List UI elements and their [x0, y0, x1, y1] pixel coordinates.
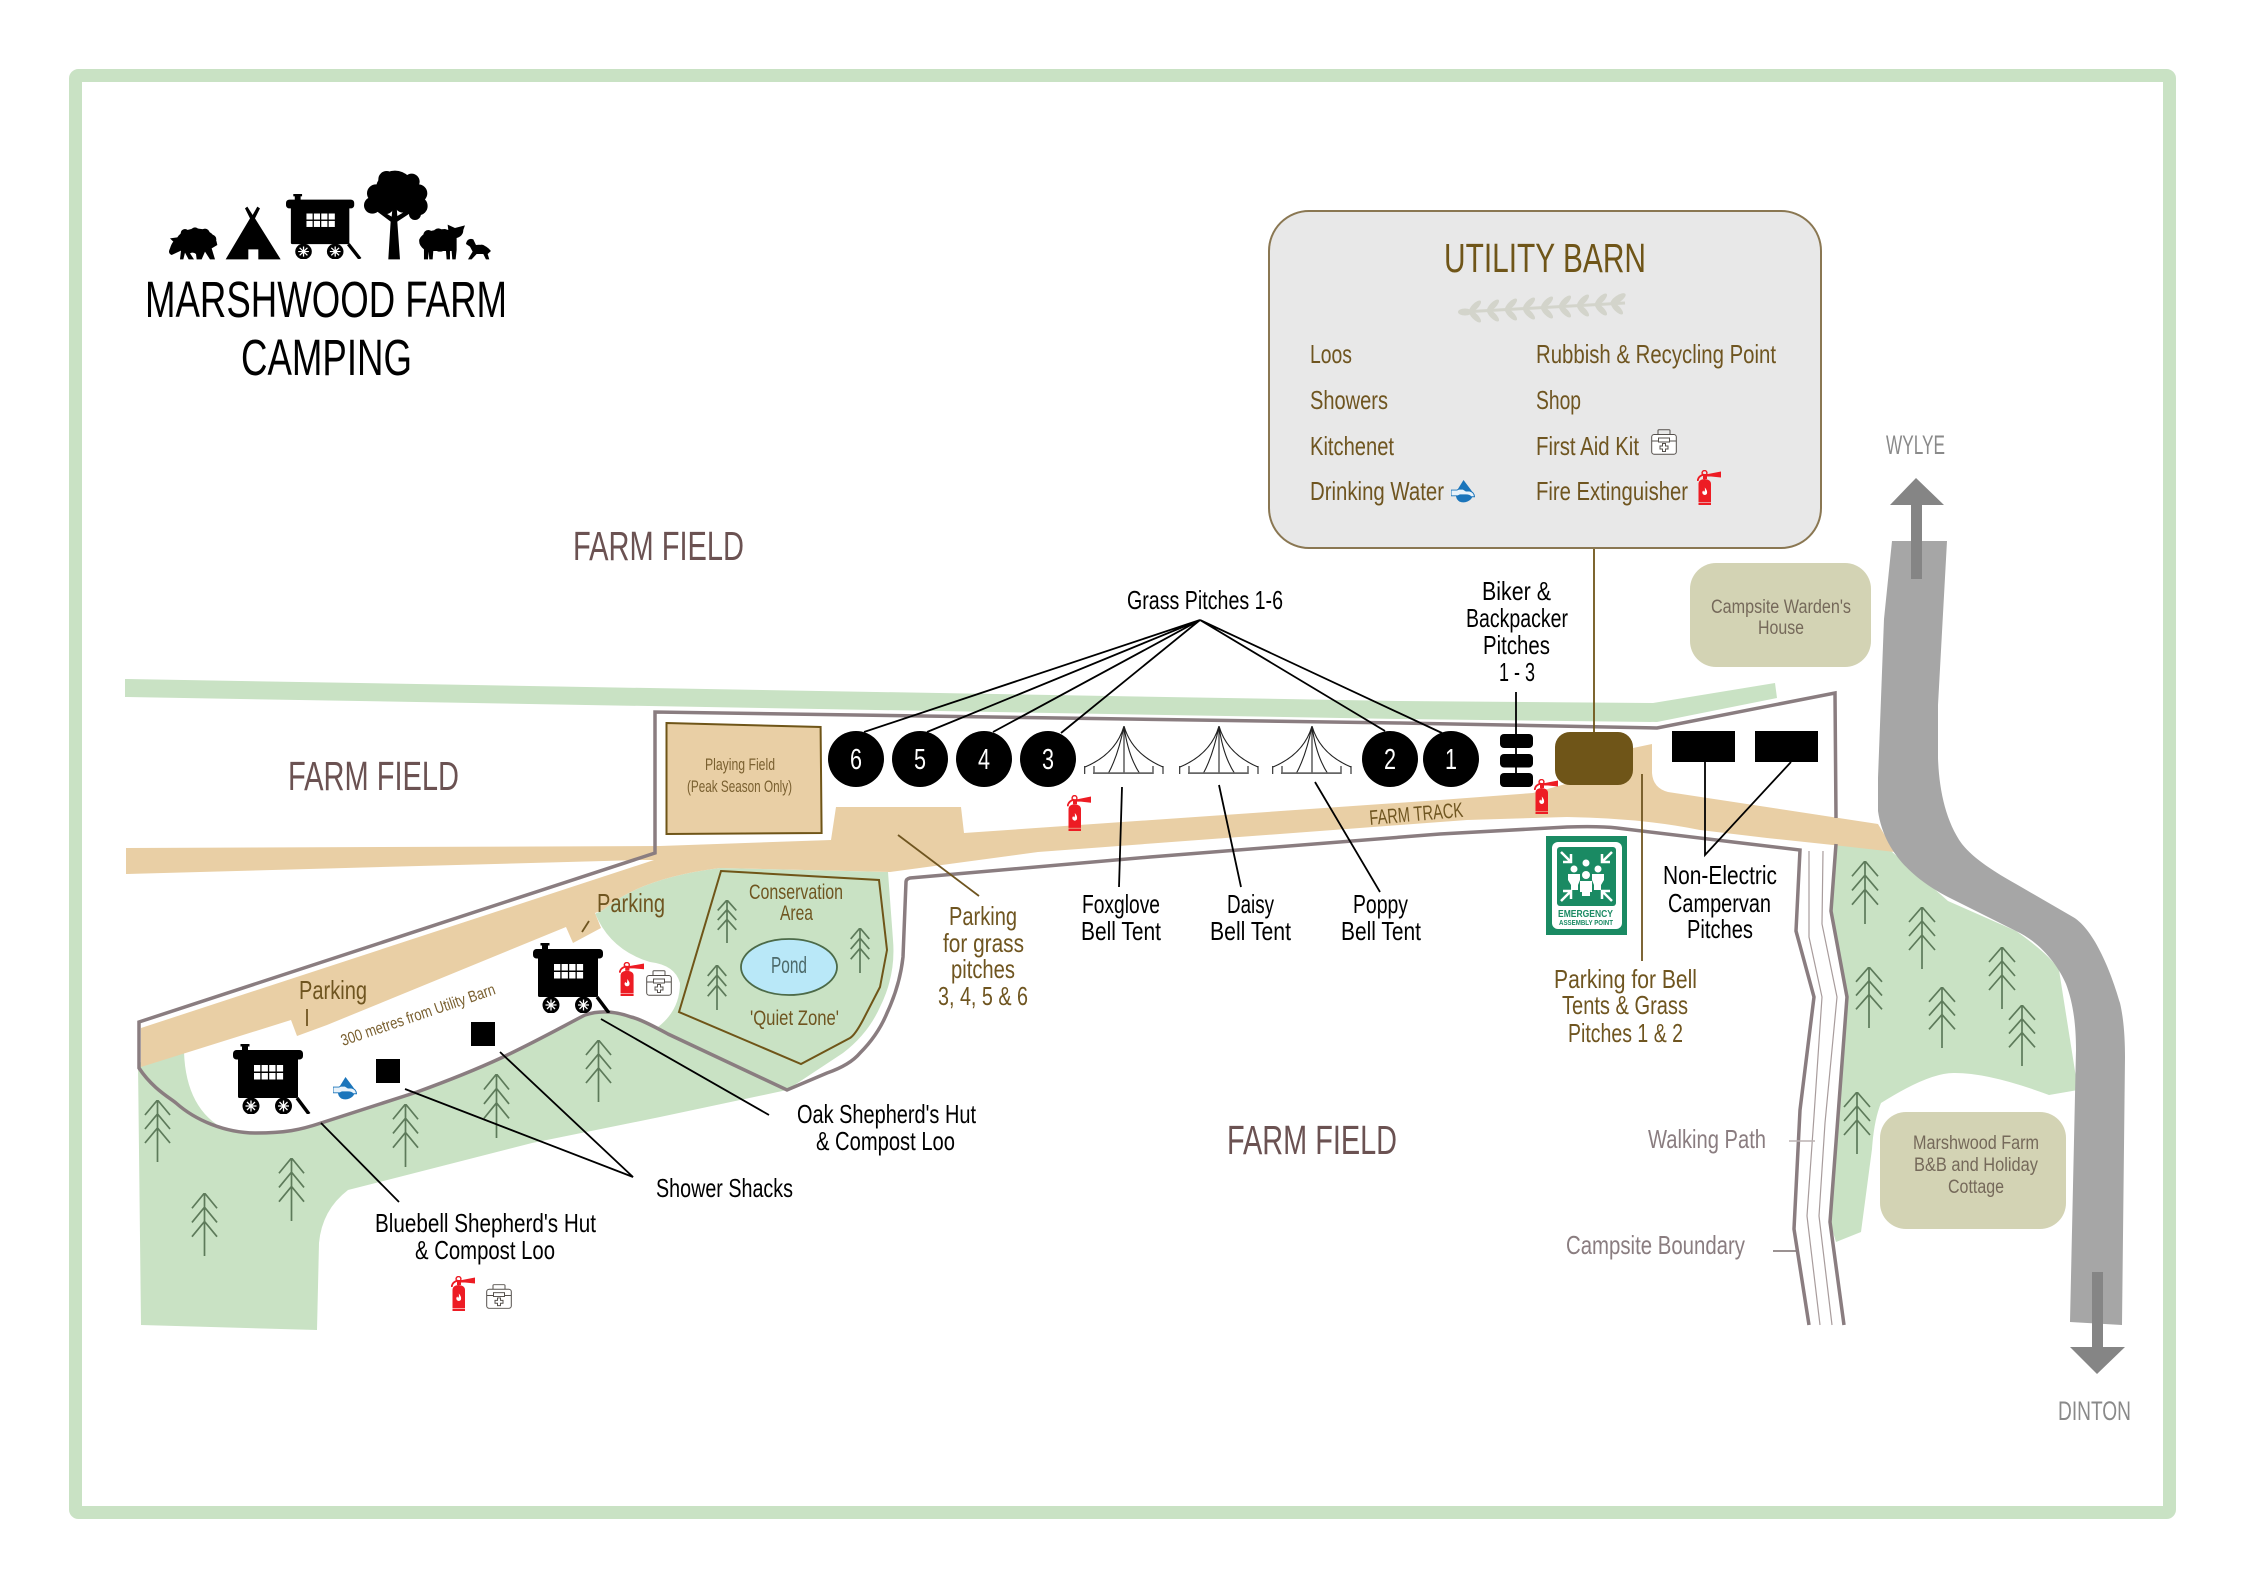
- dinton label: DINTON: [2058, 1396, 2131, 1426]
- facilities list: Rubbish & Recycling Point: [1536, 339, 1777, 369]
- logo title: MARSHWOOD FARM: [145, 271, 507, 328]
- parking for grass pitches: Parking: [949, 901, 1017, 931]
- logo title: [145, 271, 507, 386]
- marshwood farm b&b: Marshwood Farm: [1913, 1133, 2039, 1154]
- bluebell label: [375, 1208, 597, 1265]
- biker and backpacker label: [1466, 576, 1568, 687]
- marshwood farm b&b: [1880, 1112, 2066, 1229]
- icon: fire extinguisher: [1698, 471, 1721, 505]
- logo title: CAMPING: [241, 329, 412, 386]
- playing field: Playing Field: [705, 755, 775, 774]
- hut and shower leader lines: [321, 1019, 769, 1202]
- grass pitches: 5: [914, 744, 926, 776]
- emergency assembly point sign: ASSEMBLY POINT: [1559, 920, 1614, 927]
- facilities list: Drinking Water: [1310, 476, 1444, 506]
- panel: utility barn: [1269, 211, 1821, 548]
- camping clearing: [184, 913, 680, 1134]
- bell tent labels: Daisy: [1227, 889, 1274, 919]
- parking for bell tents: Pitches 1 & 2: [1568, 1018, 1683, 1048]
- icon: fire extinguisher at oak: [620, 963, 644, 996]
- icon: first aid kit: [1652, 430, 1676, 454]
- conservation area: Pond: [771, 952, 807, 978]
- field labels: FARM FIELD: [1227, 1117, 1397, 1163]
- bell tents: [1085, 726, 1351, 774]
- shower shacks: [376, 1022, 495, 1083]
- parking label: upper: Parking: [597, 888, 665, 918]
- parking for grass pitches: pitches: [951, 954, 1015, 984]
- biker pitches: [1500, 692, 1533, 787]
- parking for grass pitches: 3, 4, 5 & 6: [938, 981, 1028, 1011]
- field labels: [288, 523, 1397, 1163]
- bell tent labels: Poppy: [1353, 889, 1408, 919]
- panel heading: UTILITY BARN: [1444, 235, 1646, 281]
- woodland area: right: [1830, 844, 2078, 1242]
- bell tent leader lines: [1119, 782, 1380, 892]
- emergency assembly point sign: [1546, 836, 1627, 935]
- bluebell shepherd's hut: [233, 1044, 309, 1114]
- logo: ewe: [419, 225, 465, 259]
- facilities list: Shop: [1536, 385, 1581, 415]
- emergency assembly point sign: EMERGENCY: [1558, 909, 1613, 920]
- non-electric label: Campervan: [1668, 888, 1771, 918]
- logo: shepherd's hut: [286, 194, 360, 259]
- non-electric label: [1663, 860, 1777, 944]
- parking for grass pitches: for grass: [943, 928, 1024, 958]
- logo: lamb: [466, 239, 491, 259]
- bluebell label: Bluebell Shepherd's Hut: [375, 1208, 597, 1238]
- woodland trees: [145, 861, 2035, 1256]
- grass pitches: 1: [1445, 744, 1457, 776]
- parking for bell tents: [1554, 774, 1697, 1048]
- east boundary: [1830, 844, 1847, 1325]
- bell tent labels: Bell Tent: [1210, 916, 1292, 946]
- marshwood farm b&b: B&B and Holiday: [1914, 1155, 2038, 1176]
- logo: [145, 171, 507, 386]
- facilities list: [1310, 339, 1777, 506]
- logo: oak tree: [364, 171, 428, 259]
- distance note: 300 metres from Utility Barn: [339, 981, 498, 1050]
- bell tent labels: Foxglove: [1082, 889, 1160, 919]
- non-electric campervan pitches: [1672, 731, 1818, 855]
- ornament: laurel: [1458, 291, 1627, 324]
- oak label: & Compost Loo: [816, 1126, 955, 1156]
- non-electric label: Non-Electric: [1663, 860, 1777, 890]
- campsite warden's house: [1690, 563, 1871, 667]
- facilities list: Kitchenet: [1310, 431, 1395, 461]
- oak shepherd's hut: [533, 943, 609, 1014]
- grass pitches: [828, 731, 1479, 787]
- farm track: [126, 744, 1895, 1067]
- bluebell label: & Compost Loo: [415, 1235, 555, 1265]
- biker and backpacker label: 1 - 3: [1499, 657, 1535, 687]
- conservation area: [679, 871, 887, 1064]
- grass pitches: 6: [850, 744, 862, 776]
- arrow: to dinton: [2070, 1272, 2125, 1374]
- farm track label: FARM TRACK: [1368, 799, 1464, 830]
- utility barn building: [1555, 732, 1633, 785]
- shower label: Shower Shacks: [656, 1173, 793, 1203]
- campsite boundary fence: [139, 693, 1836, 1325]
- oak label: Oak Shepherd's Hut: [797, 1099, 977, 1129]
- arrow: to wylye: [1890, 478, 1944, 579]
- icon: fire extinguisher barn: [1535, 780, 1558, 814]
- parking for bell tents: Tents & Grass: [1562, 990, 1688, 1020]
- woodland area: left: [138, 868, 893, 1330]
- bell tent labels: Bell Tent: [1341, 916, 1422, 946]
- grass pitches leader lines: [864, 620, 1442, 733]
- conservation area: 'Quiet Zone': [750, 1007, 839, 1030]
- bell tent labels: Bell Tent: [1081, 916, 1162, 946]
- bell tent labels: [1081, 889, 1422, 946]
- icon: fire extinguisher at bluebell: [452, 1277, 475, 1311]
- icon: first aid at bluebell: [487, 1285, 511, 1308]
- walking path: [1807, 851, 1837, 1325]
- facilities list: Loos: [1310, 339, 1352, 369]
- campsite boundary label: Campsite Boundary: [1566, 1230, 1745, 1260]
- non-electric label: Pitches: [1687, 914, 1753, 944]
- road: [1878, 541, 2125, 1325]
- logo: sheep: [169, 227, 217, 259]
- conservation area: Conservation: [749, 881, 843, 904]
- icon: drinking water: [1451, 480, 1474, 502]
- facilities list: Showers: [1310, 385, 1388, 415]
- conservation area: Area: [780, 902, 813, 925]
- utility barn connector: [1593, 548, 1595, 732]
- green field hedge: [125, 679, 1777, 722]
- field labels: FARM FIELD: [573, 523, 744, 569]
- biker and backpacker label: Biker &: [1482, 576, 1551, 606]
- icon: water at bluebell: [333, 1077, 356, 1099]
- parking label: lower: [299, 975, 367, 1026]
- parking for grass pitches: [898, 835, 1028, 1011]
- grass pitches: 2: [1384, 744, 1396, 776]
- grass pitches: 3: [1042, 744, 1054, 776]
- biker and backpacker label: Pitches: [1483, 630, 1550, 660]
- campsite warden's house: Campsite Warden's: [1711, 597, 1851, 618]
- campsite warden's house: House: [1758, 618, 1804, 639]
- icon: first aid at oak: [647, 971, 671, 995]
- facilities list: Fire Extinguisher: [1536, 476, 1688, 506]
- grass pitches: 4: [978, 744, 990, 776]
- marshwood farm b&b: Cottage: [1948, 1177, 2004, 1198]
- biker and backpacker label: Backpacker: [1466, 603, 1568, 633]
- playing field: (Peak Season Only): [687, 777, 792, 796]
- oak label: [797, 1099, 977, 1156]
- facilities list: First Aid Kit: [1536, 431, 1640, 461]
- field labels: FARM FIELD: [288, 753, 459, 799]
- wylye label: WYLYE: [1886, 430, 1945, 460]
- playing field: [666, 723, 822, 834]
- parking label: upper: [582, 888, 665, 932]
- icon: fire extinguisher track: [1068, 796, 1091, 831]
- logo: tipi: [226, 207, 281, 259]
- parking for bell tents: Parking for Bell: [1554, 964, 1697, 994]
- grass pitches label: Grass Pitches 1-6: [1127, 585, 1283, 615]
- walking path label: Walking Path: [1648, 1124, 1766, 1154]
- parking label: lower: Parking: [299, 975, 367, 1005]
